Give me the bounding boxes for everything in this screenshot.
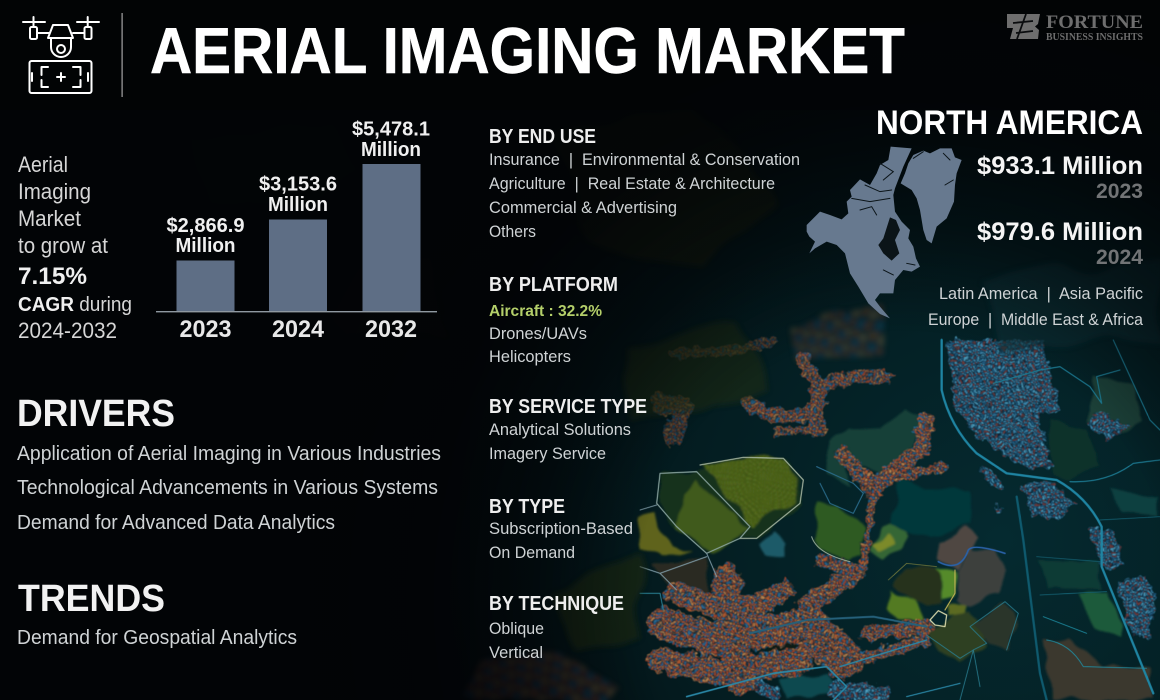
panel: by platform: BY PLATFORM xyxy=(489,274,618,296)
text block: CAGR summary: Imaging xyxy=(18,179,91,204)
text block: CAGR summary: 2024-2032 xyxy=(18,318,117,343)
panel: North America region values: Europe | Middle East & Africa xyxy=(928,310,1144,329)
text block: CAGR summary: CAGR during xyxy=(18,294,132,316)
bar chart: market size xyxy=(156,118,437,343)
bar chart: market size: $5,478.1 xyxy=(352,118,430,140)
logo: Fortune Business Insights xyxy=(1007,12,1143,43)
panel: by service type: Analytical Solutions xyxy=(489,420,631,439)
panel: by technique xyxy=(489,593,624,662)
panel: by type xyxy=(489,496,633,562)
panel: by platform: Drones/UAVs xyxy=(489,324,587,343)
panel: North America region values: 2024 xyxy=(1096,246,1143,269)
panel: drivers xyxy=(17,393,441,534)
text block: CAGR summary xyxy=(18,152,132,343)
panel: by end use: Agriculture | Real Estate & Architecture xyxy=(489,174,775,193)
bar chart: market size: $3,153.6 xyxy=(259,174,337,196)
panel: by type: On Demand xyxy=(489,543,575,562)
panel: drivers: DRIVERS xyxy=(17,393,175,435)
panel: by service type: Imagery Service xyxy=(489,444,606,463)
bar chart: market size: 2024 xyxy=(272,316,325,343)
title: AERIAL IMAGING MARKET xyxy=(150,14,905,87)
panel: by type: Subscription-Based xyxy=(489,519,633,538)
panel: trends xyxy=(17,578,297,649)
logo: Fortune Business Insights: BUSINESS INSIGHTS xyxy=(1046,32,1143,43)
text block: CAGR summary: Market xyxy=(18,206,81,231)
bar chart: market size: Million xyxy=(176,235,236,257)
panel: North America region values: 2023 xyxy=(1096,180,1143,203)
panel: trends: TRENDS xyxy=(18,578,165,620)
panel: by technique: Vertical xyxy=(489,643,543,662)
panel: by end use: Others xyxy=(489,222,536,241)
panel: by service type: BY SERVICE TYPE xyxy=(489,396,647,418)
panel: by platform: Helicopters xyxy=(489,347,571,366)
bar chart: market size: Million xyxy=(268,194,328,216)
panel: by end use: Insurance | Environmental & Conservation xyxy=(489,150,800,169)
panel: North America region values: NORTH AMERICA xyxy=(876,104,1143,142)
map: North America xyxy=(807,147,962,318)
panel: by service type xyxy=(489,396,647,463)
divider next to icon xyxy=(122,13,123,97)
roads xyxy=(640,340,1160,700)
cluster group: settlements xyxy=(660,340,1157,693)
panel: North America region values: $933.1 Million xyxy=(977,152,1143,180)
panel: North America region values: Latin America | Asia Pacific xyxy=(939,284,1143,303)
panel: North America region values xyxy=(876,104,1144,329)
panel: by technique: BY TECHNIQUE xyxy=(489,593,624,615)
panel: drivers: Technological Advancements in Various Systems xyxy=(17,477,438,499)
panel: drivers: Demand for Advanced Data Analytics xyxy=(17,512,335,534)
bar chart: market size: 2032 xyxy=(365,316,417,343)
text block: CAGR summary: to grow at xyxy=(18,233,108,258)
panel: by platform: Aircraft : 32.2% xyxy=(489,303,602,320)
bar chart: market size: Million xyxy=(361,139,421,161)
panel: trends: Demand for Geospatial Analytics xyxy=(17,627,297,649)
icon: drone with camera above viewfinder xyxy=(23,17,99,93)
panel: by type: BY TYPE xyxy=(489,496,565,518)
panel: by end use xyxy=(489,126,800,241)
logo: Fortune Business Insights: FORTUNE xyxy=(1046,12,1143,33)
panel: drivers: Application of Aerial Imaging in Various Industries xyxy=(17,443,441,465)
bar chart: market size: $2,866.9 xyxy=(166,215,244,237)
panel: North America region values: $979.6 Million xyxy=(977,218,1143,246)
panel: by end use: BY END USE xyxy=(489,126,596,148)
text block: CAGR summary: Aerial xyxy=(18,152,68,177)
panel: by end use: Commercial & Advertising xyxy=(489,198,677,217)
bar chart: market size: 2023 xyxy=(180,316,232,343)
panel: by platform xyxy=(489,274,618,366)
text block: CAGR summary: 7.15% xyxy=(18,263,87,290)
panel: by technique: Oblique xyxy=(489,619,544,638)
